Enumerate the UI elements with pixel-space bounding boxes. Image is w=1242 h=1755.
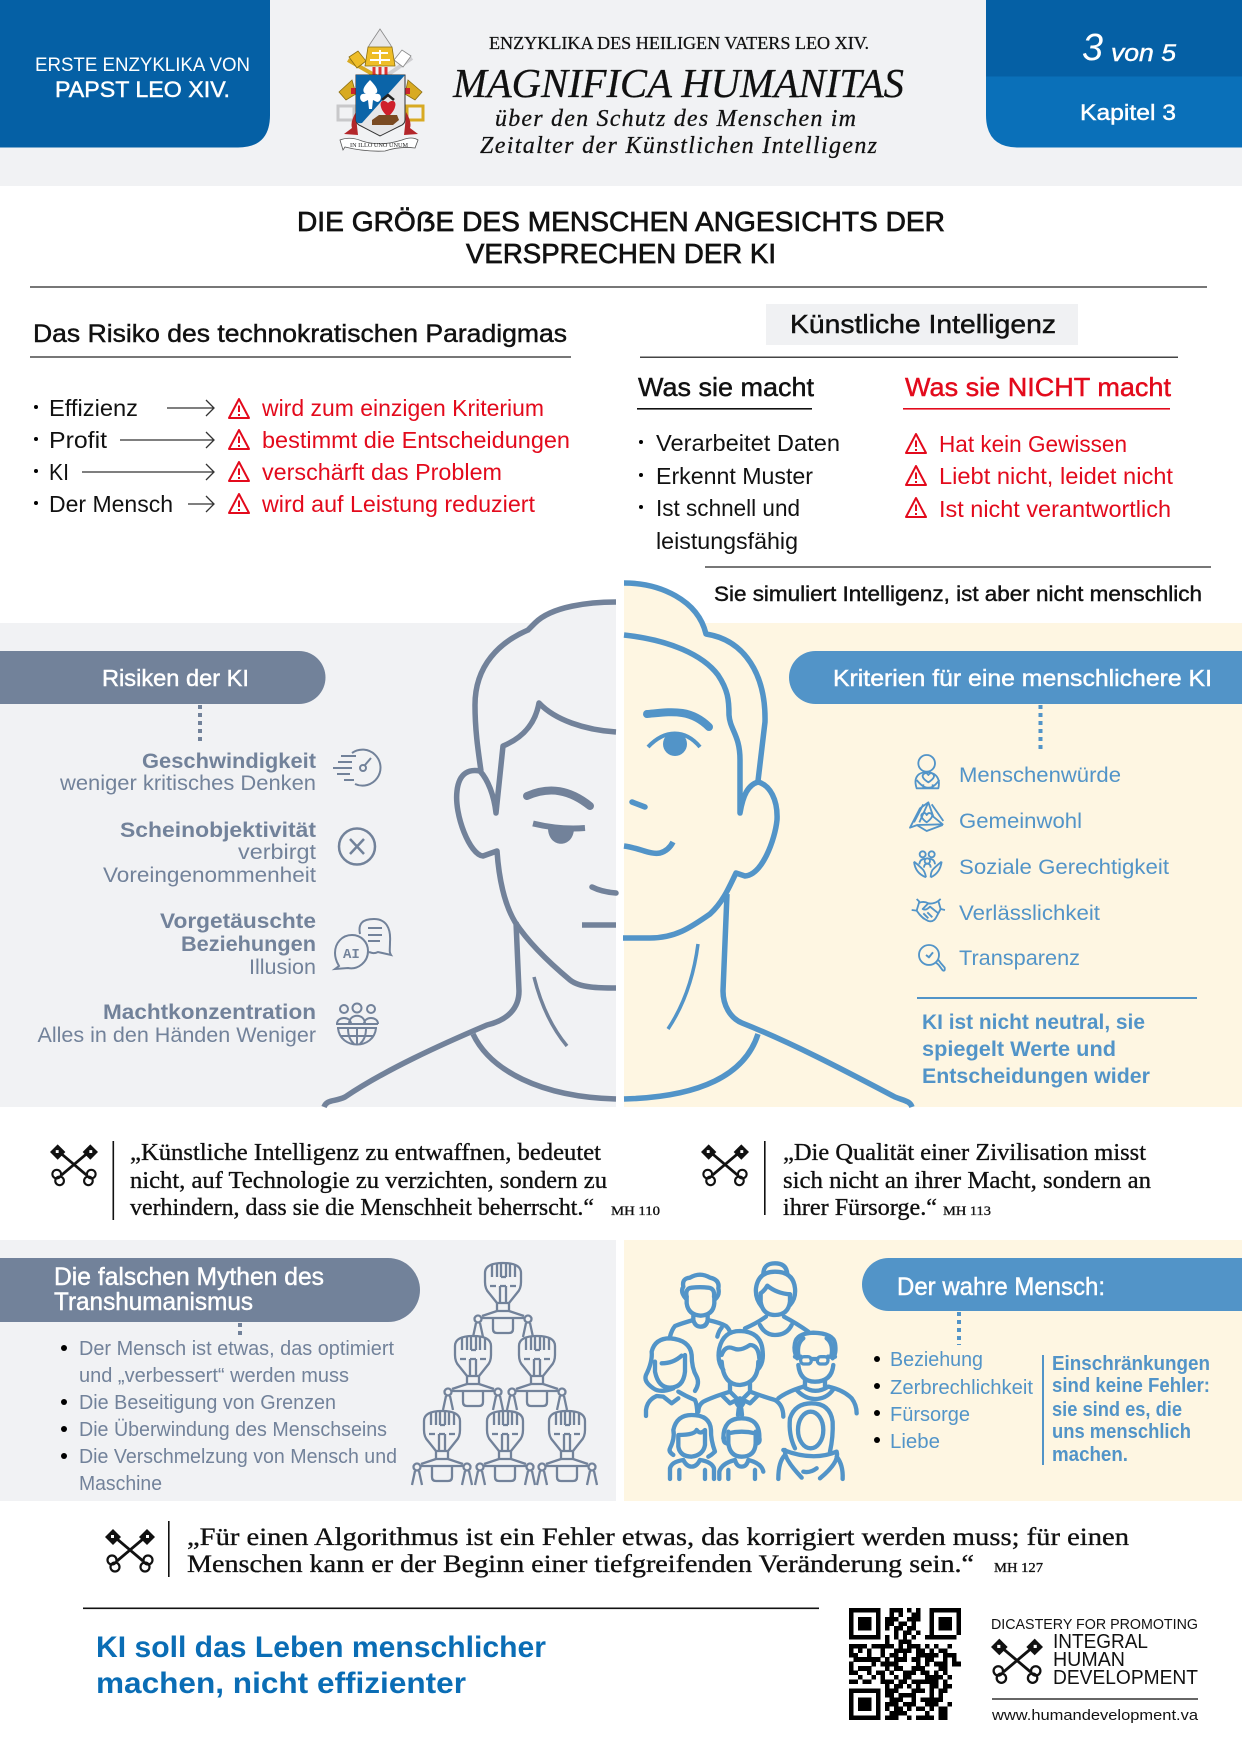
- header title block: Zeitalter der Künstlichen Intelligenz: [480, 133, 878, 159]
- list: myths: und „verbessert“ werden muss: [79, 1365, 349, 1387]
- section: criteria: [789, 651, 1242, 1088]
- panel: artificial intelligence: [637, 304, 1211, 606]
- list: human qualities: [874, 1349, 1033, 1453]
- pill: myths heading: Die falschen Mythen des: [54, 1263, 324, 1291]
- risk: Scheinobjektivität: Scheinobjektivität: [120, 819, 316, 842]
- list: myths: Der Mensch ist etwas, das optimiert: [79, 1338, 394, 1360]
- header right tab: page and chapter: 3: [1082, 27, 1103, 69]
- icon: magnifier check: [919, 945, 945, 971]
- risk: Machtkonzentration: Alles in den Händen Weniger: [38, 1024, 316, 1047]
- pill: true human heading: [862, 1258, 1242, 1311]
- list: risk items: [34, 395, 173, 517]
- pill: Risiken der KI: Risiken der KI: [102, 665, 249, 691]
- logo: Dicastery for Promoting Integral Human Development: DEVELOPMENT: [1053, 1667, 1198, 1689]
- column: what it does not do: Hat kein Gewissen: [939, 431, 1127, 457]
- risk: Machtkonzentration: [38, 1001, 316, 1047]
- red consequences: bestimmt die Entscheidungen: [262, 427, 570, 453]
- risk: Vorgetäuschte Beziehungen: Illusion: [249, 956, 316, 979]
- list: human qualities: Fürsorge: [890, 1404, 970, 1426]
- quote: MH 127: „Für einen Algorithmus ist ein Fehler etwas, das korrigiert werden muss; für einen: [187, 1522, 1129, 1551]
- risk: Scheinobjektivität: Voreingenommenheit: [103, 864, 316, 887]
- list: human qualities: Zerbrechlichkeit: [890, 1377, 1033, 1399]
- panel backgrounds: face section: [0, 583, 1242, 1107]
- panel: transhumanism myths: [0, 1240, 616, 1501]
- column: what it does: Ist schnell und: [656, 495, 800, 521]
- logo: Dicastery for Promoting Integral Human Development: [991, 1616, 1199, 1724]
- icon: common good: [910, 802, 943, 831]
- icon: papal coat of arms: [338, 29, 423, 151]
- statement: AI not neutral: KI ist nicht neutral, sie: [922, 1011, 1145, 1034]
- column: what it does: Verarbeitet Daten: [656, 430, 840, 456]
- icon: family group: [645, 1263, 857, 1479]
- statement: limits are not errors: uns menschlich: [1052, 1421, 1191, 1443]
- column: what it does not do: [903, 372, 1174, 522]
- icon: cross in circle: [339, 828, 375, 864]
- statement: AI not neutral: [922, 1011, 1150, 1088]
- quote: MH 110: „Künstliche Intelligenz zu entwaffnen, bedeutet: [130, 1140, 601, 1166]
- statement: limits are not errors: machen.: [1052, 1444, 1128, 1466]
- pill: Kriterien: Kriterien für eine menschlichere KI: [833, 665, 1212, 691]
- quote: MH 110: MH 110: [611, 1203, 660, 1218]
- illustration: left half of face: [324, 602, 616, 1107]
- list: risk items: Der Mensch: [49, 491, 173, 517]
- header left tab: PAPST LEO XIV.: [55, 77, 230, 102]
- pill: myths heading: [0, 1258, 420, 1322]
- statement: limits are not errors: [1052, 1353, 1210, 1466]
- header title block: über den Schutz des Menschen im: [495, 106, 856, 132]
- quote: MH 113: „Die Qualität einer Zivilisation misst: [783, 1140, 1146, 1166]
- QR code: [849, 1608, 961, 1720]
- icon: AI chat bubbles: [335, 919, 391, 969]
- risk: Vorgetäuschte Beziehungen: Beziehungen: [181, 933, 316, 956]
- column: what it does: leistungsfähig: [656, 528, 798, 554]
- header right tab: page and chapter: Kapitel 3: [1080, 100, 1176, 125]
- statement: AI not neutral: Entscheidungen wider: [922, 1065, 1150, 1088]
- red consequences: verschärft das Problem: [262, 459, 502, 485]
- illustration: right half of face: [623, 583, 912, 1107]
- statement: limits are not errors: Einschränkungen: [1052, 1353, 1210, 1375]
- statement: limits are not errors: sie sind es, die: [1052, 1399, 1182, 1421]
- pill: Risiken der KI: [0, 651, 326, 704]
- icon: people over globe: [336, 1004, 378, 1044]
- logo: Dicastery for Promoting Integral Human Development: www.humandevelopment.va: [991, 1707, 1199, 1724]
- warning icons: [229, 399, 249, 513]
- list: human qualities: Beziehung: [890, 1349, 983, 1371]
- pill: myths heading: Transhumanismus: [54, 1288, 253, 1316]
- quote: MH 113: sich nicht an ihrer Macht, sondern an: [783, 1168, 1151, 1194]
- main title: [297, 206, 945, 269]
- section: criteria: Transparenz: [959, 947, 1080, 970]
- quote: MH 110: verhindern, dass sie die Menschheit beherrscht.“: [130, 1195, 594, 1221]
- header band: [0, 0, 1242, 186]
- heading: Künstliche Intelligenz: [766, 304, 1078, 345]
- statement: AI not neutral: spiegelt Werte und: [922, 1038, 1116, 1061]
- quote: MH 113: [701, 1140, 1151, 1221]
- quote: MH 127: [105, 1521, 1129, 1578]
- main title: VERSPRECHEN DER KI: [466, 238, 776, 269]
- red consequences: wird auf Leistung reduziert: [261, 491, 536, 517]
- section: criteria: Soziale Gerechtigkeit: [959, 856, 1169, 879]
- closing message: KI soll das Leben menschlicher: [96, 1631, 546, 1664]
- logo: Dicastery for Promoting Integral Human Development: DICASTERY FOR PROMOTING: [991, 1616, 1198, 1633]
- quote: MH 113: MH 113: [943, 1203, 991, 1218]
- list: risk items: Profit: [49, 427, 108, 453]
- section: criteria: Verlässlichkeit: [959, 902, 1100, 925]
- header title block: [452, 33, 904, 159]
- section: AI risks: [0, 651, 391, 1047]
- icon: handshake: [912, 899, 945, 921]
- header right tab: page and chapter: [986, 0, 1242, 148]
- list: human qualities: Liebe: [890, 1431, 940, 1453]
- header left tab: ERSTE ENZYKLIKA VON: [35, 54, 250, 76]
- section: criteria: Gemeinwohl: [959, 810, 1082, 833]
- icon: AI chat bubbles: AI: [343, 947, 360, 963]
- panel: technocratic paradigm: [30, 320, 571, 517]
- quote: MH 127: Menschen kann er der Beginn einer tiefgreifenden Veränderung sein.“: [187, 1549, 974, 1578]
- header right tab: page and chapter: von 5: [1111, 40, 1177, 67]
- risk: Machtkonzentration: Machtkonzentration: [103, 1001, 316, 1024]
- risk: Vorgetäuschte Beziehungen: [160, 910, 316, 979]
- list: myths: [61, 1338, 397, 1495]
- pill: true human heading: Der wahre Mensch:: [897, 1273, 1105, 1301]
- risk: Scheinobjektivität: [103, 819, 316, 887]
- quote: MH 110: [50, 1140, 660, 1221]
- icon: papal coat of arms: IN ILLO UNO UNUM: [350, 142, 408, 149]
- column: what it does: Was sie macht: [638, 372, 815, 402]
- closing message: [96, 1631, 546, 1700]
- risk: Scheinobjektivität: verbirgt: [238, 841, 316, 864]
- list: myths: Die Verschmelzung von Mensch und: [79, 1446, 397, 1468]
- column: what it does not do: Was sie NICHT macht: [905, 372, 1172, 402]
- risk: Geschwindigkeit: Geschwindigkeit: [142, 750, 316, 773]
- risk: Vorgetäuschte Beziehungen: Vorgetäuschte: [160, 910, 316, 933]
- header title block: MAGNIFICA HUMANITAS: [452, 60, 904, 106]
- list: myths: Die Überwindung des Menschseins: [79, 1419, 387, 1441]
- panel: the true human: [624, 1240, 1242, 1501]
- risk: Geschwindigkeit: [59, 750, 316, 795]
- section: criteria: Menschenwürde: [959, 764, 1121, 787]
- heading: Künstliche Intelligenz: Künstliche Intelligenz: [790, 309, 1056, 339]
- header left tab: [0, 0, 270, 148]
- icon: social justice: [914, 851, 942, 877]
- icon: speed clock: [333, 750, 380, 786]
- closing message: machen, nicht effizienter: [96, 1667, 466, 1700]
- arrows: [82, 400, 214, 512]
- quote: MH 127: MH 127: [994, 1560, 1043, 1575]
- icon: human dignity: [915, 755, 939, 788]
- column: what it does: [637, 372, 840, 554]
- logo: Dicastery for Promoting Integral Human Development: INTEGRAL: [1053, 1631, 1148, 1653]
- list: risk items: KI: [49, 459, 69, 485]
- column: what it does not do: Liebt nicht, leidet nicht: [939, 463, 1174, 489]
- quote: MH 110: nicht, auf Technologie zu verzichten, sondern zu: [130, 1168, 607, 1194]
- logo: Dicastery for Promoting Integral Human Development: HUMAN: [1053, 1649, 1125, 1671]
- quote: MH 113: ihrer Fürsorge.“: [783, 1195, 937, 1221]
- column: what it does: Erkennt Muster: [656, 463, 813, 489]
- statement: simulated intelligence: Sie simuliert Intelligenz, ist aber nicht menschlich: [714, 583, 1202, 606]
- main title: DIE GRÖẞE DES MENSCHEN ANGESICHTS DER: [297, 206, 945, 237]
- header title block: ENZYKLIKA DES HEILIGEN VATERS LEO XIV.: [489, 33, 869, 53]
- risk: Geschwindigkeit: weniger kritisches Denken: [59, 772, 316, 795]
- red consequences: wird zum einzigen Kriterium: [261, 395, 544, 421]
- icon: pyramid of robots: [412, 1263, 597, 1485]
- red consequences: [261, 395, 570, 517]
- heading: technocratic risk: Das Risiko des technokratischen Paradigmas: [33, 320, 567, 348]
- list: myths: Maschine: [79, 1473, 162, 1495]
- list: myths: Die Beseitigung von Grenzen: [79, 1392, 336, 1414]
- pill: Kriterien: [789, 651, 1242, 704]
- statement: limits are not errors: sind keine Fehler:: [1052, 1375, 1210, 1397]
- list: risk items: Effizienz: [49, 395, 138, 421]
- column: what it does not do: Ist nicht verantwortlich: [939, 496, 1171, 522]
